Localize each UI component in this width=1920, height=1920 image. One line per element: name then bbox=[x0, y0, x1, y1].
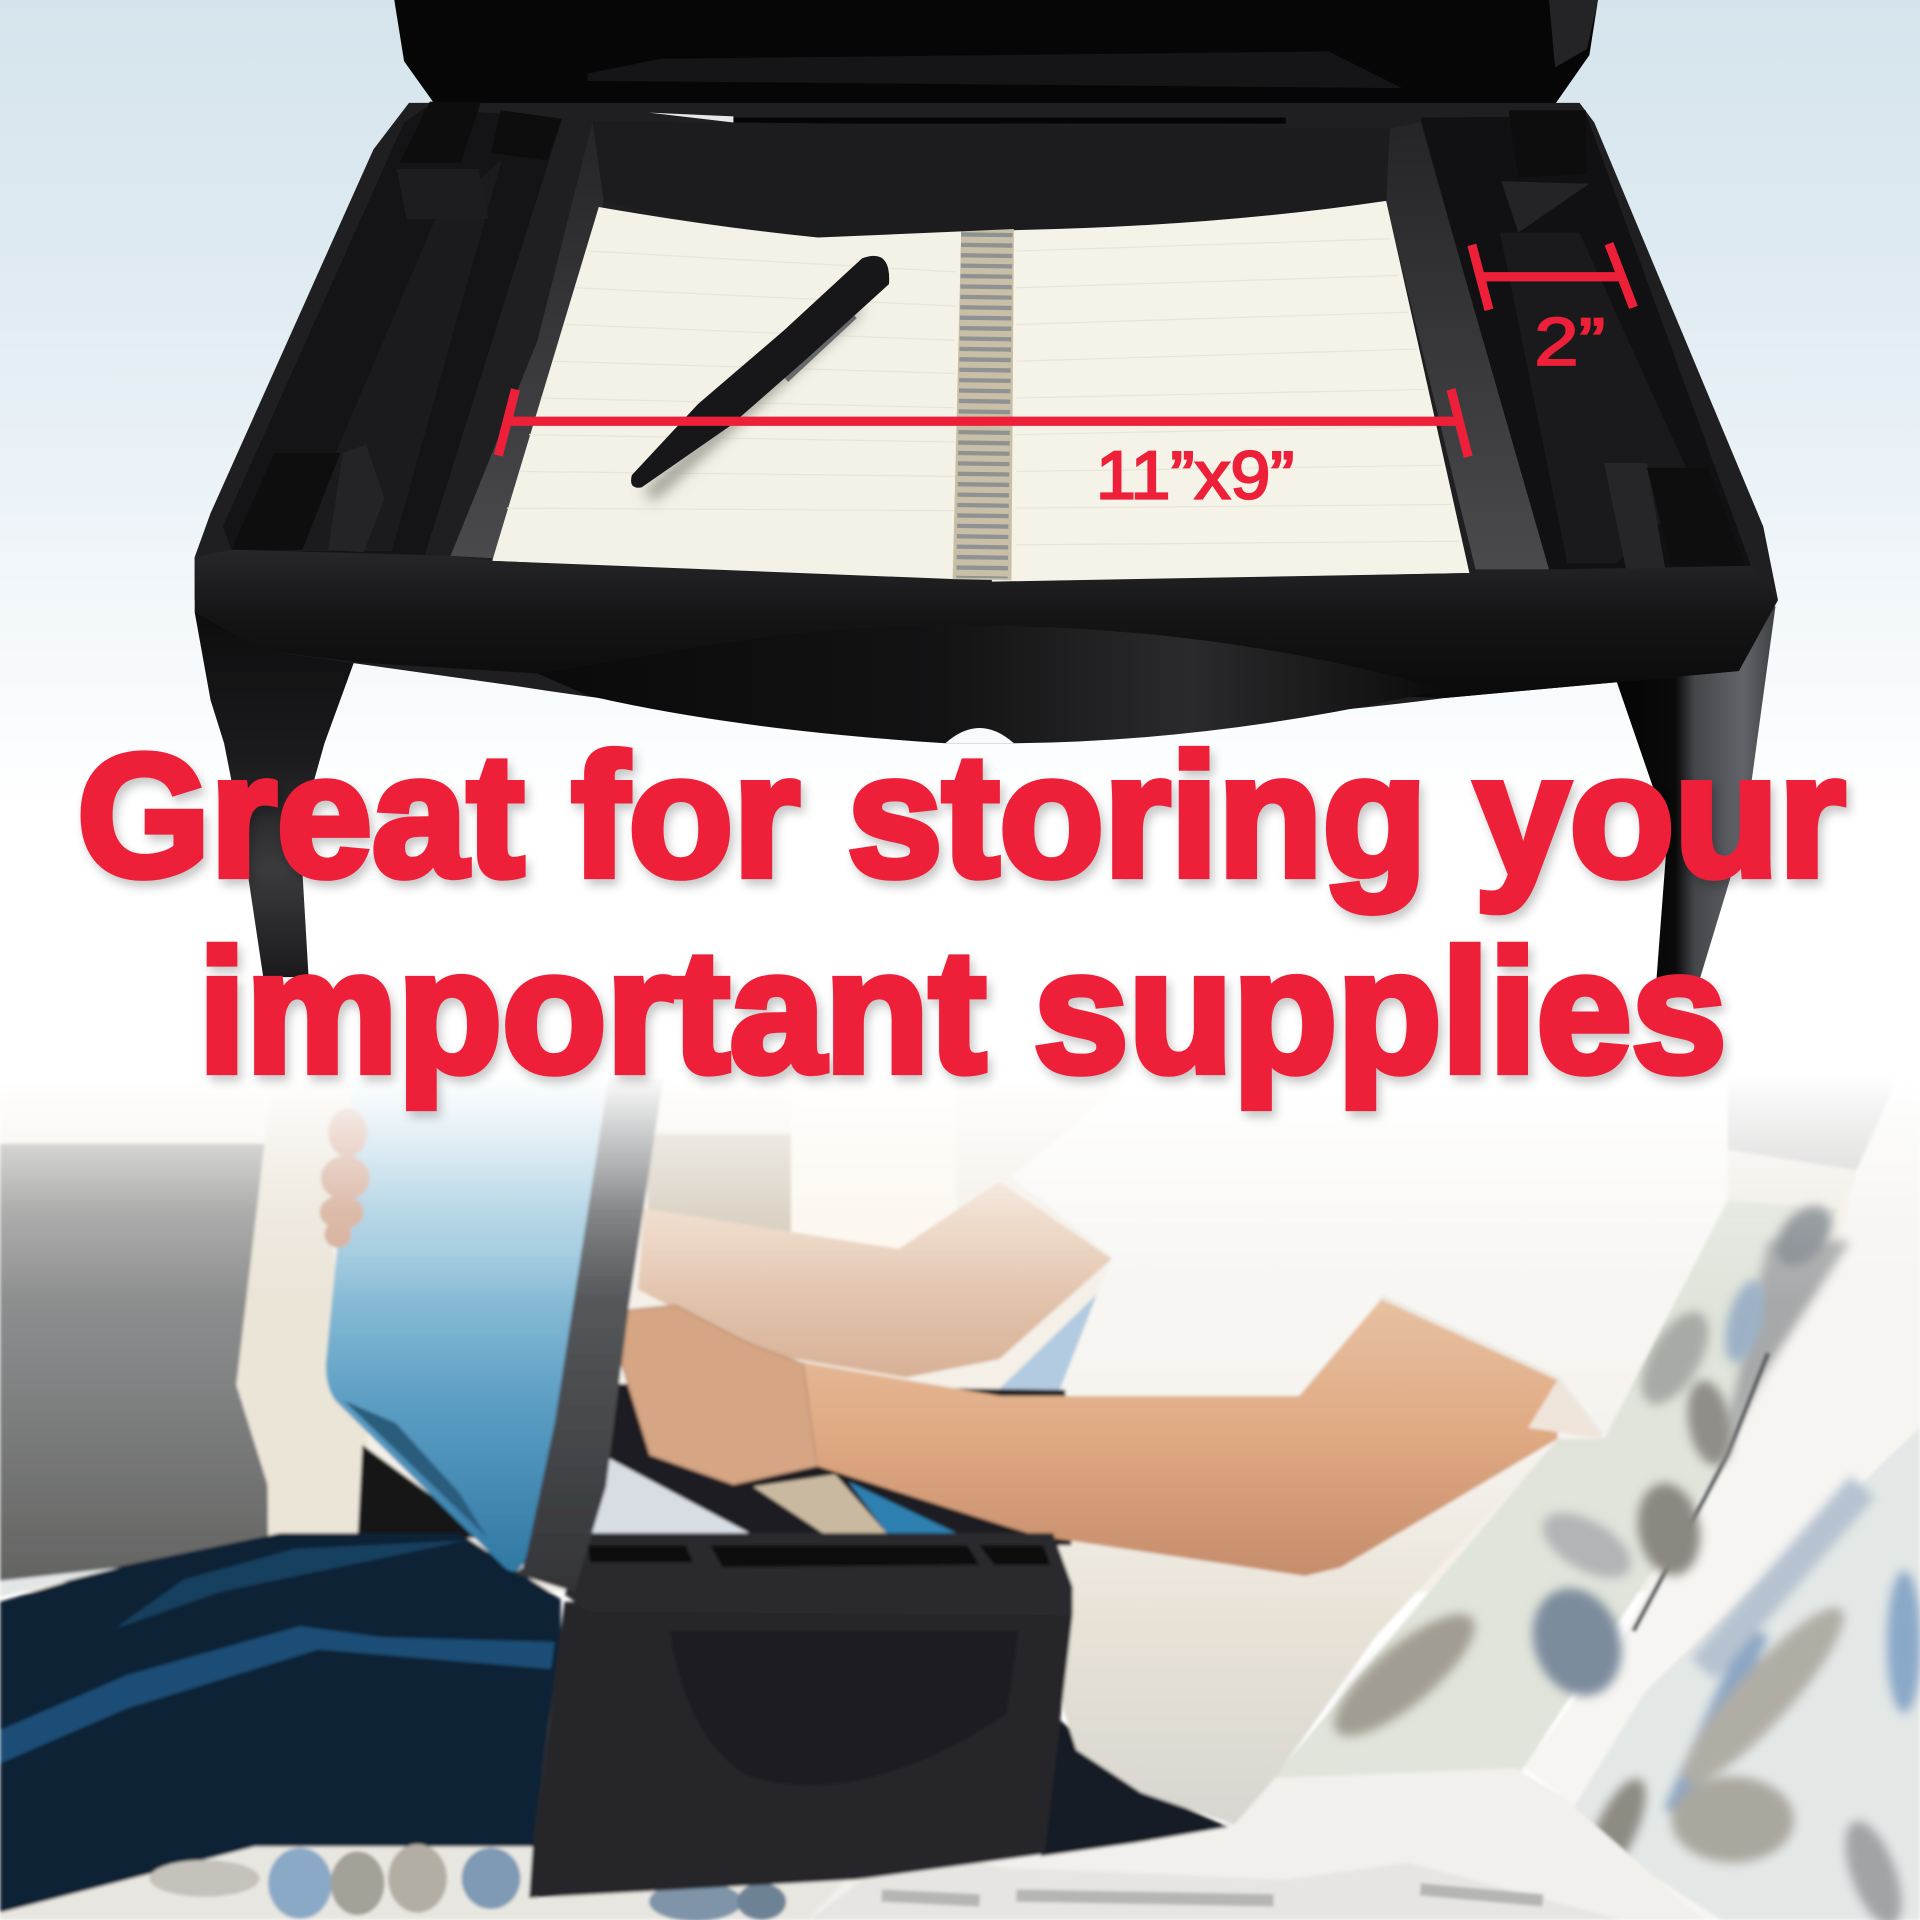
pillow shadow bbox=[1720, 1240, 1850, 1457]
white bed sheet bbox=[808, 1768, 1704, 1920]
drawer recess bbox=[670, 1631, 1019, 1786]
wall behind arm bbox=[648, 1134, 791, 1244]
hand bbox=[622, 1305, 817, 1484]
forearm bbox=[784, 1299, 1558, 1576]
bright window bbox=[791, 1078, 956, 1251]
lid dark edge bbox=[514, 1078, 664, 1592]
drawer notch bbox=[945, 728, 1014, 743]
right white pillow bbox=[1522, 1078, 1920, 1920]
right page bbox=[992, 201, 1469, 582]
lid inner detail bbox=[588, 51, 1402, 88]
t-shirt bbox=[1011, 1078, 1728, 1824]
pen bbox=[631, 256, 889, 488]
curtain bbox=[236, 1078, 369, 1540]
floral sheet bottom left bbox=[0, 1847, 867, 1920]
closed lap desk unit bbox=[529, 1533, 1073, 1898]
floral pillow leaves bbox=[1318, 1195, 1843, 1754]
tray outer body bbox=[195, 103, 1778, 726]
printed pillow leaves bbox=[1575, 1487, 1920, 1920]
jeans bbox=[0, 1533, 561, 1913]
right compartment bbox=[1420, 116, 1751, 569]
pen clip bbox=[786, 316, 855, 380]
spiral binding bbox=[953, 229, 1014, 580]
open lid bbox=[326, 1078, 664, 1592]
sleeve hem bbox=[1381, 1297, 1602, 1435]
lifestyle photo: person using lap desk in bed bbox=[0, 1073, 1920, 1920]
notebook bbox=[492, 201, 1469, 582]
tray base bbox=[529, 1602, 1073, 1898]
open book bbox=[809, 1847, 1622, 1920]
blue pillow behind arm bbox=[986, 1286, 1106, 1406]
pen shadow bbox=[649, 306, 857, 496]
headline: important supplies bbox=[198, 914, 1727, 1108]
upper arm bbox=[638, 1182, 1112, 1378]
left page bbox=[492, 207, 961, 579]
corner cells bbox=[399, 102, 481, 163]
book text blocks bbox=[882, 1889, 1543, 1900]
right leg bbox=[1614, 606, 1776, 992]
scattered tray contents bbox=[590, 1455, 749, 1533]
jeans highlight bbox=[0, 1626, 555, 1763]
sloped wall right of notebook bbox=[1386, 122, 1549, 569]
front rim band bbox=[195, 550, 1778, 698]
label 11x9: 11”x9” bbox=[1096, 438, 1294, 513]
dimension: 11 by 9 inches bbox=[498, 389, 1468, 513]
lid blue face bbox=[326, 1078, 609, 1571]
left compartment bbox=[223, 108, 562, 555]
sloped wall left of notebook bbox=[451, 121, 604, 558]
tray interior bbox=[588, 1384, 1071, 1545]
horizontal measure line bbox=[498, 389, 1468, 457]
room background bbox=[0, 1078, 1920, 1592]
ruled lines bbox=[507, 239, 1460, 545]
floral pillow bbox=[1273, 1200, 1839, 1778]
lid top bbox=[394, 0, 1598, 104]
label 2: 2” bbox=[1534, 305, 1605, 380]
left leg bbox=[195, 612, 354, 977]
bed sheet strip left bbox=[0, 1567, 121, 1597]
cream pillow behind bbox=[1720, 1149, 1859, 1212]
photo fade into white bbox=[0, 1073, 1920, 1305]
fingers gripping lid bbox=[320, 1108, 370, 1248]
lid handle recess bbox=[344, 1401, 487, 1538]
printed pillow lower bbox=[1566, 1428, 1920, 1920]
pillow seam bbox=[1633, 1353, 1768, 1631]
tray rim bbox=[564, 1533, 1073, 1615]
hinge slit bbox=[649, 113, 733, 122]
dark stand behind lid bbox=[358, 1445, 490, 1538]
back wall of well bbox=[593, 121, 1390, 238]
left compartment floor bbox=[294, 159, 502, 551]
headline bbox=[77, 719, 1845, 1108]
rim slots bbox=[588, 1545, 1051, 1567]
right compartment floor bbox=[1500, 233, 1696, 563]
dark pants under shirt bbox=[1041, 1714, 1228, 1856]
lap desk product top view bbox=[195, 0, 1778, 992]
dimension: 2 inches bbox=[1472, 244, 1633, 380]
short measure line bbox=[1472, 244, 1633, 310]
headline: Great for storing your bbox=[77, 719, 1845, 913]
front drawer bulge bbox=[538, 625, 1442, 743]
wall panel left bbox=[0, 1144, 268, 1582]
sleeve underside bbox=[1528, 1380, 1604, 1439]
wall panel right bbox=[1720, 1078, 1920, 1176]
